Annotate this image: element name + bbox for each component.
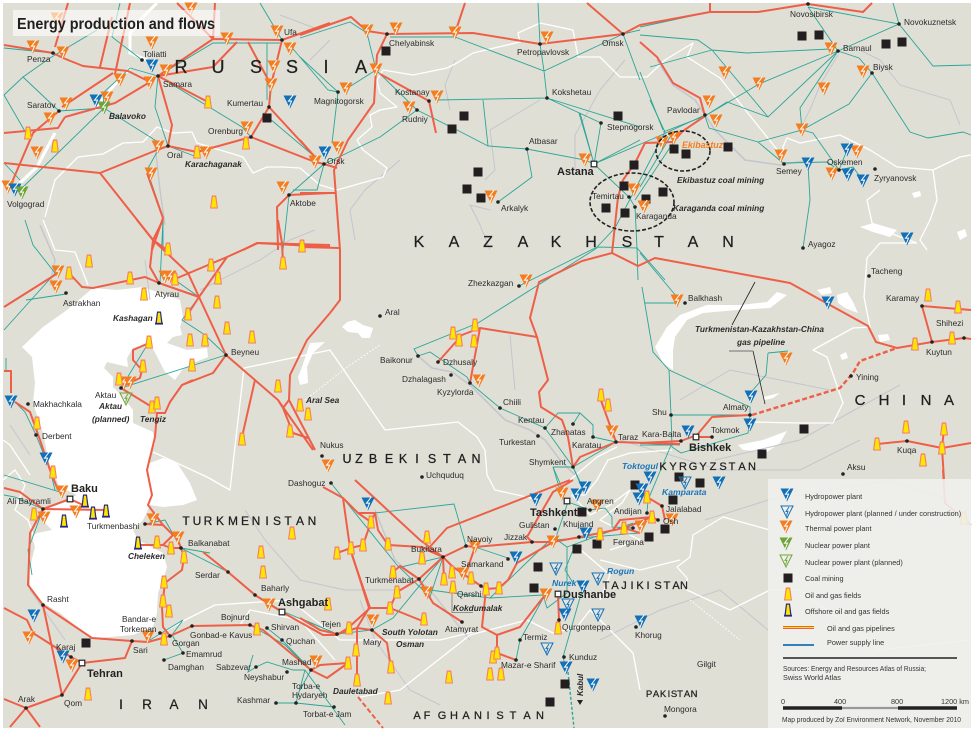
legend: oil and gas fields: Oil and gas fields (805, 591, 861, 600)
city labels: Kostanay (395, 87, 430, 97)
coal mining symbols (82, 30, 906, 706)
Issyk-Kul (738, 431, 787, 452)
city labels: Kuytun (926, 347, 952, 357)
city labels: Khorug (635, 630, 662, 640)
city labels: Quchan (286, 636, 315, 646)
energy field labels in italics: Dauletabad (333, 686, 379, 696)
Lake Zaysan (860, 223, 897, 237)
legend: hydropower plant planned: Hydropower plant (planned / under construction) (805, 509, 961, 518)
panel: legend (768, 479, 971, 728)
legend: offshore oil and gas fields (784, 604, 890, 617)
Dotted boundary (305, 345, 860, 640)
city labels: Shihezi (936, 318, 963, 328)
city labels: Dzhalagash (402, 374, 446, 384)
city labels: Karatau (572, 440, 601, 450)
city labels: Neyshabur (244, 672, 284, 682)
city labels: Omsk (602, 38, 625, 48)
city labels: Petropavlovsk (517, 47, 570, 57)
sources text (783, 664, 926, 682)
city labels: Shu (652, 407, 667, 417)
energy field labels in italics: (planned) (92, 414, 130, 424)
city labels: Chelyabinsk (389, 38, 435, 48)
city labels: Qurgonteppa (562, 622, 611, 632)
city labels: Oskemen (827, 157, 863, 167)
city labels: Kyzylorda (437, 387, 474, 397)
nuclear power plant symbols (16, 101, 132, 405)
city labels: Karaganda (636, 211, 677, 221)
city labels: Emamrud (186, 649, 222, 659)
city labels: Aksu (847, 462, 866, 472)
legend: oil and gas pipelines: Oil and gas pipelines (827, 624, 895, 633)
legend: oil and gas fields (784, 588, 861, 600)
legend: power supply line (783, 638, 884, 647)
city labels: Samarkand (461, 559, 504, 569)
China gas pipeline dashed (752, 348, 897, 415)
city labels: Jalalabad (666, 504, 702, 514)
city labels: Arkalyk (501, 203, 529, 213)
capital city labels: Ashgabat (278, 597, 328, 609)
capital city labels: Bishkek (689, 442, 732, 454)
hydropower project labels (552, 461, 707, 588)
city labels: Novokuznetsk (904, 17, 957, 27)
city labels: Sari (133, 645, 148, 655)
scale bar (781, 697, 969, 708)
city labels: Biysk (873, 62, 894, 72)
city labels: Bandar-e (122, 614, 157, 624)
title band: Energy production and flows (17, 16, 215, 33)
legend divider (783, 657, 957, 659)
capital city labels: Tashkent (530, 507, 578, 519)
country names: UZBEKISTAN (342, 452, 481, 466)
energy field labels in italics: South Yolotan (382, 627, 438, 637)
city labels: Osh (663, 516, 679, 526)
city labels: Mashad (282, 657, 312, 667)
legend: hydropower plant planned (781, 506, 961, 518)
water bodies (22, 191, 967, 638)
city labels: Yining (856, 372, 879, 382)
hydropower plants planned symbols (541, 477, 691, 655)
city labels: Bukhara (411, 544, 442, 554)
city labels: Termiz (523, 632, 547, 642)
legend: coal mining (784, 574, 844, 583)
city labels: Hydaryeh (292, 690, 328, 700)
city labels: Kunduz (569, 652, 597, 662)
legend: power supply line: Power supply line (827, 638, 884, 647)
capital city squares (67, 161, 699, 666)
city labels: Temirtau (592, 191, 624, 201)
city labels: Volgograd (7, 199, 45, 209)
city labels: Sabzevar (216, 662, 251, 672)
city labels: Zhezkazgan (468, 278, 514, 288)
city labels: Ufa (284, 27, 297, 37)
city labels: Jizzak (504, 532, 528, 542)
energy field labels in italics: Aktau (98, 401, 122, 411)
scale bar: 800 (891, 697, 903, 706)
Kabul river label with arrow: Kabul (576, 673, 585, 696)
city labels: Gonbad-e Kavus (190, 630, 252, 640)
city labels: Balkanabat (188, 538, 230, 548)
city labels: Uchquduq (426, 470, 464, 480)
city labels: Gulistan (519, 520, 550, 530)
hydropower project labels: Kamparata (662, 487, 707, 497)
city labels: Qom (64, 698, 82, 708)
city labels: Kentau (518, 415, 545, 425)
city labels: Tokmok (711, 425, 740, 435)
offshore oil and gas field symbols (60, 312, 163, 550)
city labels: Kumertau (227, 98, 263, 108)
energy field labels in italics: Kashagan (113, 313, 153, 323)
city labels: Nukus (320, 440, 344, 450)
country names: IRAN (119, 697, 208, 712)
country names (119, 57, 954, 722)
legend: nuclear power plant: Nuclear power plant (805, 541, 870, 550)
Ekibastuz coal mining ellipse (656, 131, 710, 171)
city labels: Magnitogorsk (314, 96, 365, 106)
city labels: Tejen (321, 619, 341, 629)
capital city labels: Baku (71, 483, 98, 495)
Volga reservoir (20, 3, 157, 183)
city labels: Tacheng (871, 266, 903, 276)
city labels: Atamyrat (445, 624, 479, 634)
city labels: Pavlodar (667, 105, 700, 115)
city labels: Novosibirsk (790, 9, 834, 19)
energy field labels in italics: Karachaganak (185, 159, 242, 169)
capital city labels: Tehran (87, 668, 123, 680)
legend: coal mining: Coal mining (805, 574, 844, 583)
city labels: Serdar (195, 570, 220, 580)
legend: oil and gas pipelines (783, 624, 895, 633)
city labels: Kara-Balta (642, 429, 682, 439)
city labels: Balkhash (688, 293, 723, 303)
city labels: Baharly (261, 583, 290, 593)
legend: nuclear power plant planned (780, 555, 903, 567)
energy field labels in italics: Ekibastuz coal mining (677, 175, 764, 185)
legend: hydropower plant: Hydropower plant (805, 492, 862, 501)
annotation leader lines (452, 282, 765, 612)
energy field labels in italics: Kokdumalak (453, 603, 503, 613)
energy field labels in italics: Aral Sea (305, 395, 340, 405)
city labels: Ayagoz (808, 239, 836, 249)
legend: thermal power plant (780, 520, 872, 534)
legend: nuclear power plant planned: Nuclear power plant (planned) (805, 558, 903, 567)
city labels: Mongora (664, 704, 697, 714)
city labels: Chiili (503, 397, 521, 407)
city labels: Fergana (613, 537, 644, 547)
scale bar: 0 (781, 697, 785, 706)
city labels: Turkmenbashi (87, 521, 139, 531)
scale bar: 1200 km (941, 697, 969, 706)
city labels: Mazar-e Sharif (501, 660, 556, 670)
city labels: Derbent (42, 431, 72, 441)
Dauletabad dashed pipeline (358, 697, 383, 728)
city labels: Dashoguz (288, 478, 325, 488)
city labels: Ali Bayramli (7, 496, 51, 506)
city labels: Karaj (56, 642, 76, 652)
city labels: Bojnurd (221, 612, 250, 622)
city labels: Angren (587, 496, 614, 506)
hydropower project labels: Nurek (552, 578, 578, 588)
city labels: Baikonur (380, 355, 413, 365)
city labels: Turkestan (499, 437, 536, 447)
city labels: Turkmenabat (365, 575, 414, 585)
city labels: Atyrau (155, 289, 179, 299)
city labels: Toliatti (143, 49, 167, 59)
city labels: Andijan (614, 506, 642, 516)
city labels: Orsk (327, 156, 345, 166)
city labels: Karamay (886, 293, 920, 303)
Aral Sea (298, 342, 325, 385)
city labels: Kashmar (237, 695, 270, 705)
energy field labels in italics: Tengiz (140, 414, 167, 424)
country names: CHINA (855, 392, 954, 409)
energy field labels in italics: gas pipeline (736, 337, 785, 347)
country names: TAJIKISTAN (603, 580, 688, 592)
city labels: Barnaul (843, 43, 872, 53)
city labels: Aral (385, 307, 400, 317)
country names: KAZAKHSTAN (414, 234, 734, 251)
city labels: Semey (776, 166, 803, 176)
energy field labels in italics: Karaganda coal mining (673, 203, 764, 213)
sources text: Sources: Energy and Resources Atlas of Russia; (783, 664, 926, 673)
city labels: Shymkent (529, 457, 567, 467)
city labels: Dzhusaly (443, 357, 478, 367)
city labels: Orenburg (208, 126, 243, 136)
city labels: Qarshi (457, 589, 482, 599)
Ekibastuz label in orange: Ekibastuz (682, 140, 724, 150)
city labels: Aktobe (290, 198, 316, 208)
Kabul dashed line (568, 672, 574, 728)
title band (13, 10, 220, 36)
Lake Balkhash (655, 292, 787, 370)
capital city labels: Dushanbe (563, 589, 616, 601)
energy field labels in italics (92, 111, 824, 696)
legend: offshore oil and gas fields: Offshore oil and gas fields (805, 607, 890, 616)
city labels: Navoiy (467, 534, 493, 544)
energy field labels in italics: Turkmenistan-Kazakhstan-China (695, 324, 824, 334)
city labels: Taraz (618, 432, 638, 442)
city labels: Arak (18, 694, 36, 704)
city labels: Torba-e (292, 681, 321, 691)
Kabul river label with arrow (576, 673, 585, 705)
country names: TURKMENISTAN (182, 514, 316, 528)
hydropower project labels: Rogun (607, 566, 634, 576)
city labels: Mary (363, 637, 382, 647)
city labels: Beyneu (231, 347, 260, 357)
sources text: Swiss World Atlas (783, 673, 841, 682)
country names: PAKISTAN (646, 689, 698, 700)
city labels: Gilgit (697, 659, 717, 669)
city labels: Makhachkala (33, 399, 82, 409)
city labels: Kokshetau (552, 87, 592, 97)
hydropower project labels: Toktogul (622, 461, 659, 471)
city labels: Torkeman (120, 624, 157, 634)
city labels: Atbasar (529, 136, 558, 146)
energy field labels in italics: Balavoko (109, 111, 146, 121)
legend: nuclear power plant (780, 537, 870, 550)
city labels: Khujand (563, 519, 594, 529)
country names: AFGHANISTAN (413, 710, 544, 722)
legend: hydropower plant (780, 488, 862, 502)
city labels: Gorgan (172, 638, 200, 648)
city labels: Aktau (95, 390, 117, 400)
city labels: Saratov (27, 100, 56, 110)
capital city labels (71, 166, 732, 680)
city labels: Rudniy (402, 114, 429, 124)
city labels: Oral (167, 150, 183, 160)
city labels: Astrakhan (63, 298, 101, 308)
Alakol lakes (837, 292, 858, 313)
country names: KYRGYZSTAN (659, 461, 756, 473)
city labels: Almaty (723, 402, 749, 412)
city labels: Damghan (168, 662, 204, 672)
map credit: Map produced by Zoï Environment Network, November 2010 (782, 715, 961, 724)
Caspian Sea (22, 287, 208, 638)
country names: RUSSIA (174, 57, 367, 77)
city labels: Rasht (47, 594, 69, 604)
Kapchagay reservoir (763, 393, 780, 400)
Karaganda coal mining ellipse (590, 173, 674, 231)
city labels: Kuqa (897, 445, 917, 455)
scale bar: 400 (834, 697, 846, 706)
city labels: Penza (27, 54, 51, 64)
city labels: Torbat-e Jam (303, 709, 352, 719)
energy field labels in italics: Osman (396, 639, 424, 649)
city labels: Samara (163, 79, 192, 89)
energy field labels in italics: Cheleken (128, 551, 165, 561)
capital city labels: Astana (557, 166, 595, 178)
city labels: Stepnogorsk (607, 122, 654, 132)
city labels: Zhanatas (551, 427, 586, 437)
city labels: Zyryanovsk (874, 173, 917, 183)
legend: thermal power plant: Thermal power plant (805, 524, 872, 533)
city labels: Shirvan (271, 622, 300, 632)
